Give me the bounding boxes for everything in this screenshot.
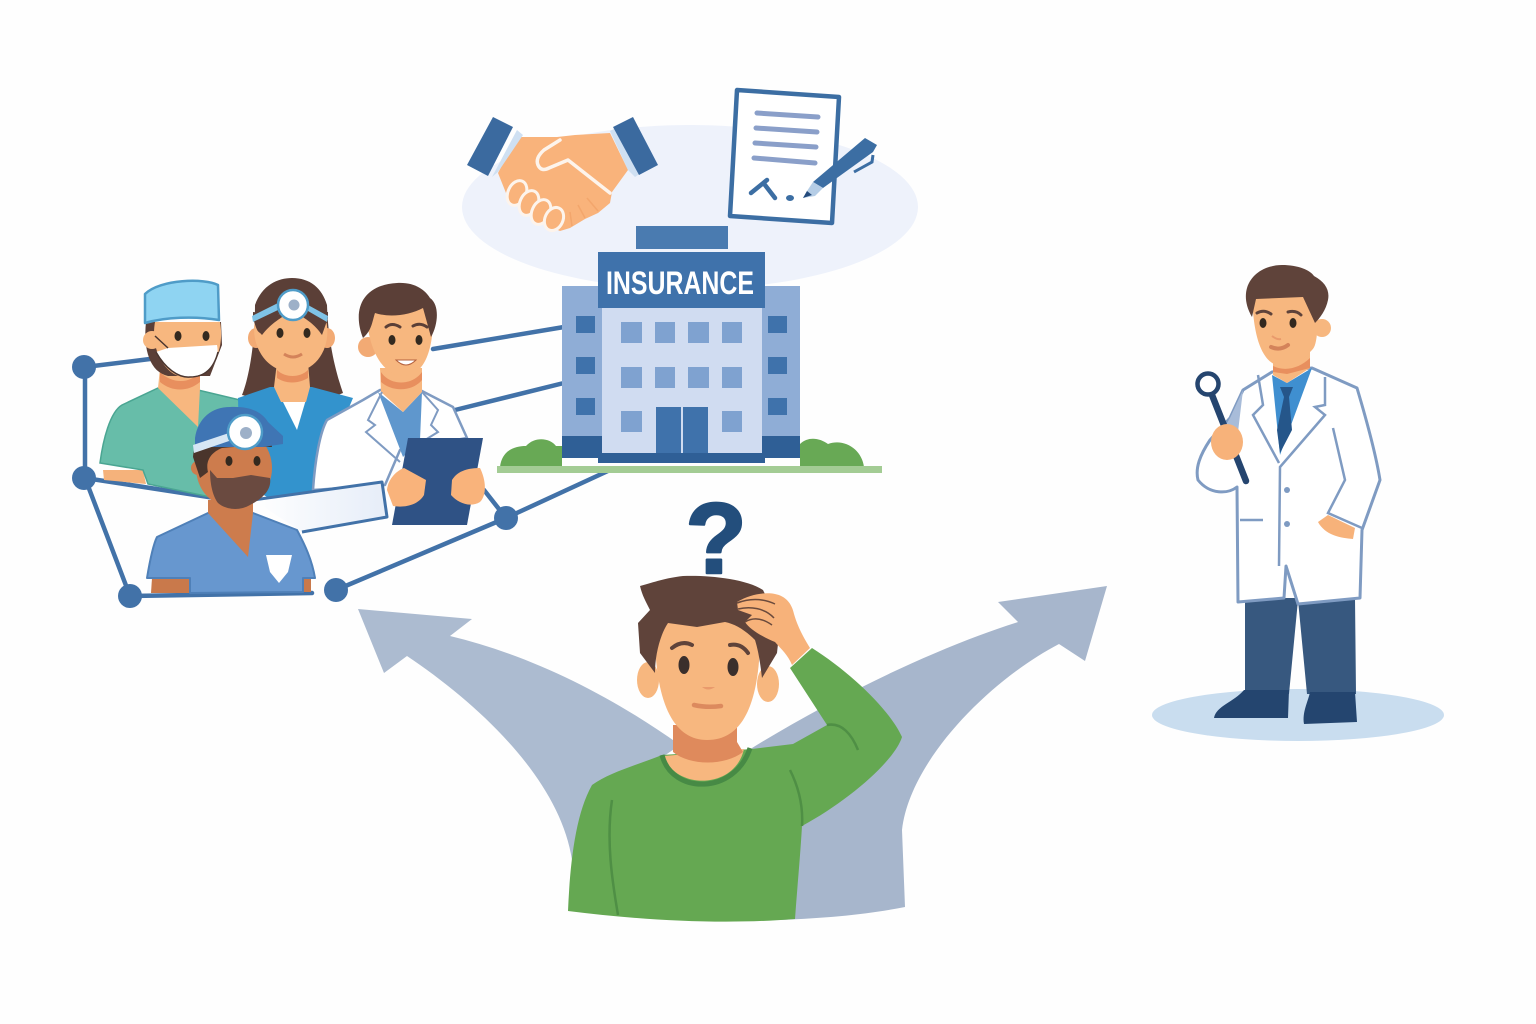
- icon: signed contract and pen: [730, 90, 877, 223]
- shoes: [1214, 690, 1289, 718]
- eyes and expression: [678, 656, 690, 674]
- white coat: [1197, 368, 1380, 604]
- arrow: left path toward the network: [358, 609, 680, 860]
- network node dots: [72, 355, 518, 608]
- network connection lines: [85, 327, 610, 596]
- blue shirt: [1272, 368, 1312, 455]
- female doctor with head mirror: [238, 278, 353, 497]
- hair: [638, 576, 780, 678]
- hand on hip: [1318, 515, 1355, 539]
- ground shadow: [1152, 689, 1444, 741]
- trousers: [1245, 598, 1356, 694]
- central tower: [602, 300, 762, 460]
- door: [656, 407, 708, 463]
- chest skin: [664, 749, 744, 781]
- insurance sign: [598, 252, 765, 308]
- male doctor in lab coat: [313, 283, 485, 525]
- icon: handshake: [467, 117, 658, 234]
- clipboard: [392, 438, 483, 525]
- bearded doctor in blue scrubs: [147, 407, 387, 593]
- ears: [1313, 319, 1331, 337]
- independent doctor: [1152, 265, 1444, 741]
- neck: [673, 725, 743, 762]
- sleeve shading: [1224, 390, 1243, 432]
- hands on clipboard: [387, 468, 426, 507]
- face: [1252, 285, 1318, 367]
- hand scratching head: [737, 593, 810, 665]
- medical team: [100, 278, 485, 593]
- coat lapels and pockets: [1240, 375, 1362, 566]
- insurance sign: INSURANCE: [606, 265, 754, 301]
- windows: [576, 316, 787, 415]
- confused person: [568, 483, 902, 922]
- ears: [637, 662, 659, 698]
- insurance building: [497, 226, 882, 473]
- hand holding tool: [1211, 424, 1243, 460]
- surgeon in teal scrubs: [100, 281, 245, 498]
- arrow: right path toward the independent doctor: [752, 586, 1107, 920]
- cloud behind the insurance agreement: [462, 125, 918, 289]
- hair: [1246, 265, 1328, 323]
- magnifier tool: [1198, 374, 1246, 481]
- roof block: [636, 226, 728, 249]
- face: [655, 610, 760, 740]
- green sweater: [568, 648, 902, 922]
- neck: [1273, 350, 1310, 383]
- bushes and ground: [500, 439, 562, 467]
- icon: question mark: ?: [685, 483, 747, 595]
- side wings: [562, 286, 800, 458]
- eyes and smile: [1260, 318, 1266, 328]
- tie: [1277, 387, 1293, 453]
